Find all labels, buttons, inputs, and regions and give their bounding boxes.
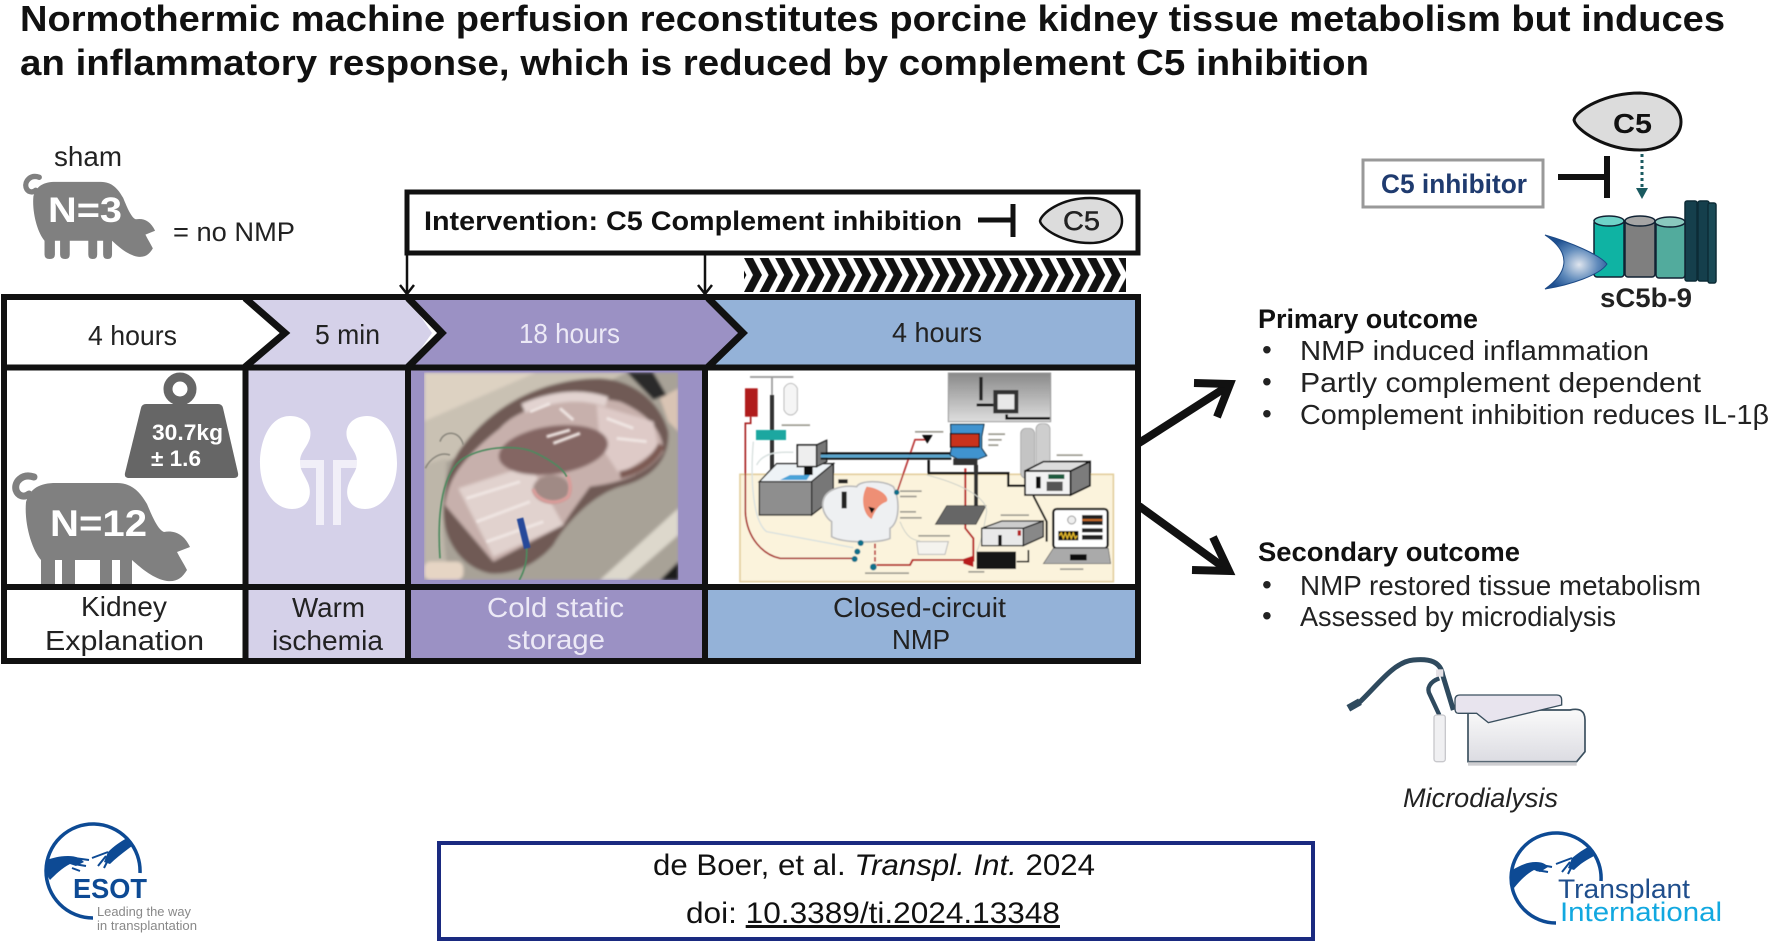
icon: explant pig N=12 xyxy=(16,476,190,584)
step labels: Explanation xyxy=(45,625,204,656)
step labels: storage xyxy=(507,624,605,655)
water bath xyxy=(759,464,833,482)
logo: ESOT: Leading the way xyxy=(97,904,191,919)
text block: primary outcome: Partly complement dependent xyxy=(1300,367,1701,398)
sham label: sham xyxy=(54,141,122,172)
logo: ESOT: ESOT xyxy=(73,873,147,904)
text block: secondary outcome: • xyxy=(1262,600,1272,631)
step labels: Warm xyxy=(292,592,365,623)
C5 inhibitor box xyxy=(1363,160,1543,207)
panel: intervention box xyxy=(407,192,1138,253)
dotted arrow xyxy=(1636,154,1648,199)
step labels: Kidney xyxy=(81,591,167,622)
perfusion chamber xyxy=(823,482,898,542)
arrow: to primary outcome xyxy=(1139,383,1230,443)
icon: microdialysis device xyxy=(1348,660,1585,766)
text block: primary outcome: NMP induced inflammation xyxy=(1300,335,1649,366)
icon: weight xyxy=(125,377,238,478)
duration labels: 5 min xyxy=(315,319,380,350)
tubes xyxy=(745,417,853,558)
arrow: to secondary outcome xyxy=(1139,506,1229,571)
chevron band xyxy=(744,258,1126,292)
oxygen box xyxy=(948,373,1051,422)
duration labels: 18 hours xyxy=(519,318,620,349)
icon: sham pig N=3 xyxy=(26,177,155,259)
duration labels: 4 hours xyxy=(88,320,177,351)
logo: Transplant International xyxy=(1511,833,1722,927)
icon: C5 molecule large: C5 xyxy=(1613,108,1652,139)
table grid xyxy=(4,297,1138,661)
text block: secondary outcome: NMP restored tissue metabolism xyxy=(1300,570,1701,601)
text block: primary outcome: • xyxy=(1262,334,1272,365)
text block: primary outcome: • xyxy=(1262,398,1272,429)
cylinders xyxy=(1021,428,1035,478)
C5 inhibition schematic xyxy=(1363,93,1716,313)
logo: ESOT: in transplantation xyxy=(97,918,197,933)
heater xyxy=(797,445,817,467)
sham group xyxy=(26,141,295,259)
column fills xyxy=(246,368,408,586)
small labels xyxy=(782,424,1083,574)
chevron borders xyxy=(245,298,285,367)
text block: secondary outcome: • xyxy=(1262,569,1272,600)
step labels xyxy=(45,591,1006,656)
pipes xyxy=(821,452,951,455)
step labels: ischemia xyxy=(272,625,383,656)
laptop xyxy=(1053,509,1108,548)
diagram: NMP circuit xyxy=(740,373,1113,582)
arrow: intervention NMP start xyxy=(698,254,712,294)
icon: C5 molecule xyxy=(1040,198,1122,243)
logo: Transplant International: Transplant xyxy=(1558,874,1691,904)
duration labels xyxy=(88,317,982,351)
title: an inflammatory response, which is reduced by complement C5 inhibition xyxy=(20,42,1369,83)
bubble trap xyxy=(922,435,933,444)
icon: kidneys xyxy=(260,416,397,525)
step labels: Closed-circuit xyxy=(833,592,1006,623)
flow meter xyxy=(1025,462,1090,471)
panel: timeline table xyxy=(4,297,1138,661)
text block: primary outcome: Primary outcome xyxy=(1258,304,1478,334)
text block: primary outcome: • xyxy=(1262,366,1272,397)
text block: secondary outcome: Assessed by microdialysis xyxy=(1300,601,1616,632)
intervention text: Intervention: C5 Complement inhibition xyxy=(424,206,962,236)
step labels: NMP xyxy=(892,624,950,655)
microdialysis label: Microdialysis xyxy=(1403,783,1558,813)
no NMP label: = no NMP xyxy=(173,217,295,247)
icon: sham pig N=3: N=3 xyxy=(48,191,122,230)
text block: secondary outcome xyxy=(1258,537,1701,632)
citation box xyxy=(439,843,1313,939)
arrow: intervention start xyxy=(400,254,414,294)
title xyxy=(20,0,1725,83)
icon: C5 molecule large xyxy=(1574,93,1681,150)
inhibition symbol xyxy=(1558,156,1607,198)
inhibition symbol xyxy=(978,204,1013,237)
sC5b-9 label: sC5b-9 xyxy=(1600,283,1692,313)
infusion stand xyxy=(750,377,793,472)
citation box: doi: 10.3389/ti.2024.13348 xyxy=(686,897,1060,930)
photo: kidney in cold storage xyxy=(424,372,678,580)
icon: sC5b-9 complex xyxy=(1545,201,1716,289)
pump xyxy=(963,556,973,567)
icon: explant pig N=12: N=12 xyxy=(50,503,147,544)
duration labels: 4 hours xyxy=(892,317,982,348)
icon: weight: ± 1.6 xyxy=(151,446,201,471)
citation box: de Boer, et al. Transpl. Int. 2024 xyxy=(653,849,1095,882)
C5 inhibitor box: C5 inhibitor xyxy=(1381,169,1527,199)
text block: primary outcome: Complement inhibition reduces IL-1β xyxy=(1300,399,1769,430)
oxygenator xyxy=(950,424,987,464)
step labels: Cold static xyxy=(487,592,624,623)
logo: ESOT xyxy=(46,824,197,933)
microdialysis mini xyxy=(917,542,948,554)
icon: weight: 30.7kg xyxy=(152,420,223,445)
connectors xyxy=(894,490,899,495)
work surface xyxy=(740,474,1113,582)
icon: C5 molecule: C5 xyxy=(1063,206,1100,236)
control unit xyxy=(982,521,1043,528)
text block: primary outcome xyxy=(1258,304,1769,430)
text block: secondary outcome: Secondary outcome xyxy=(1258,537,1520,567)
logo: Transplant International: International xyxy=(1560,897,1722,927)
header fills xyxy=(6,298,1136,660)
